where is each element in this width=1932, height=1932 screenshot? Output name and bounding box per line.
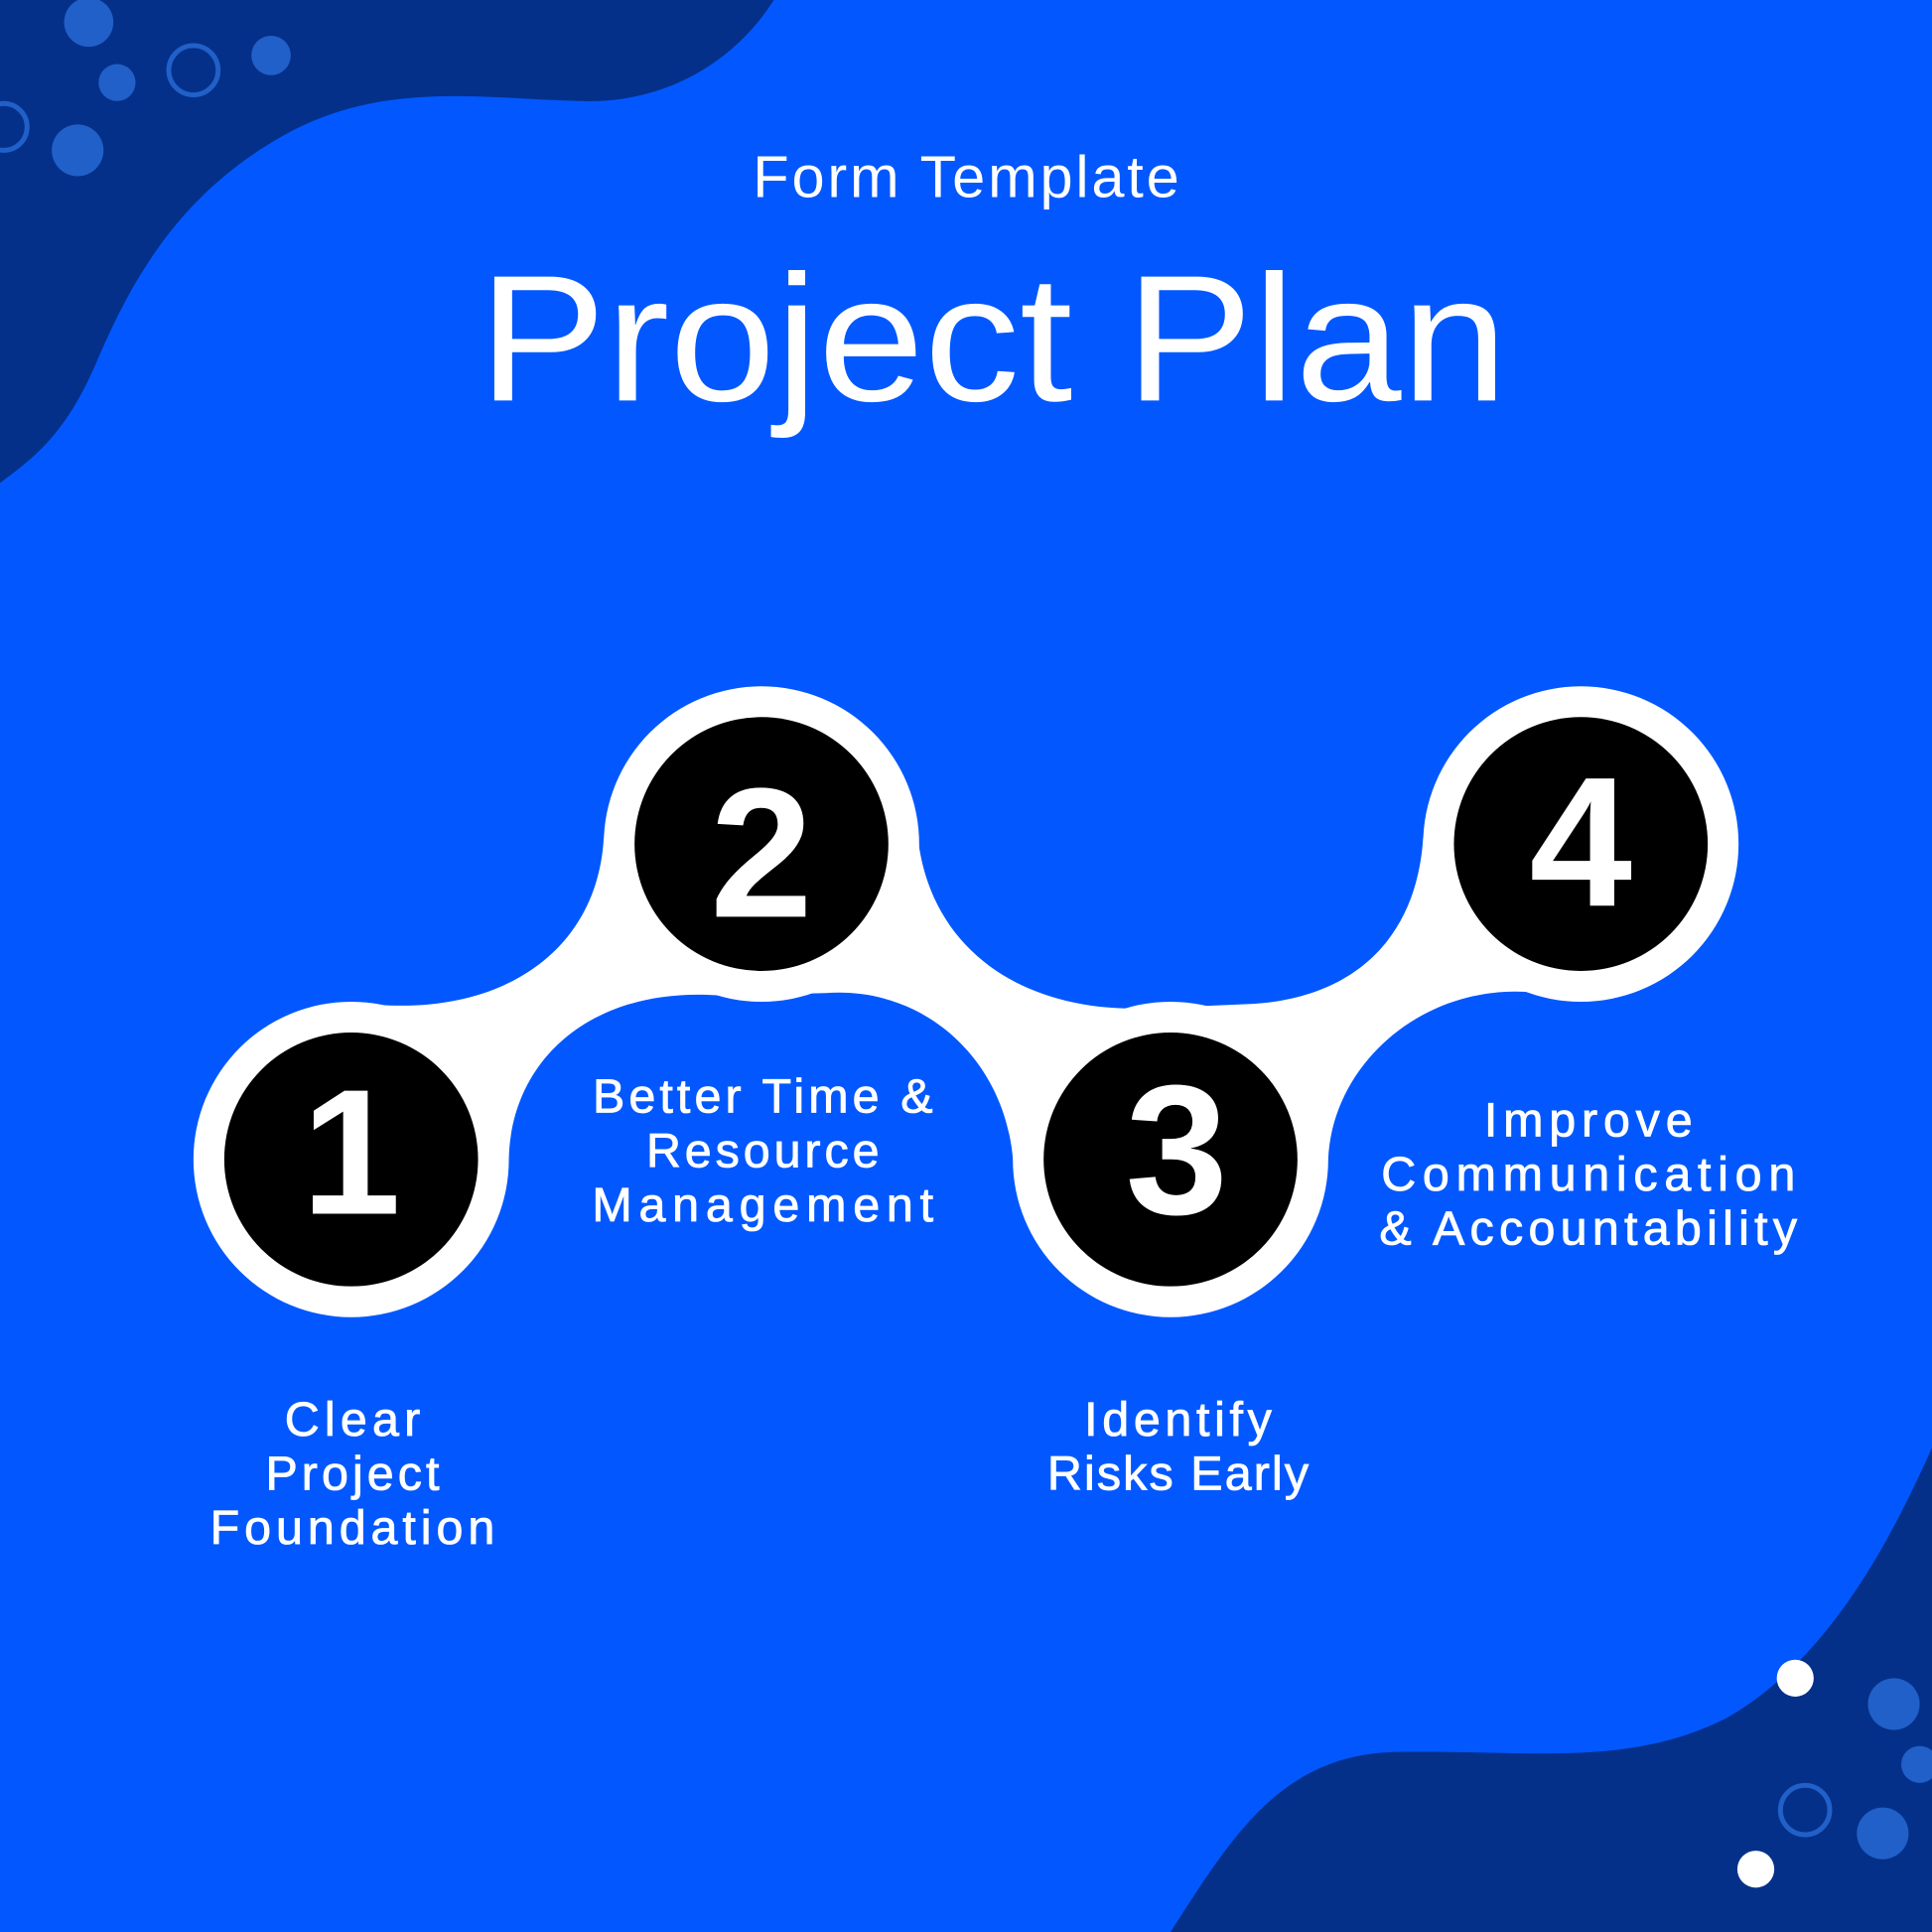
label 2: Management [592,1178,934,1232]
title: Project Plan [479,238,1507,439]
label 1: Clear [285,1393,420,1447]
process chain [194,686,1738,1317]
label 3: Identify [1084,1393,1273,1447]
step 1 circle: 1 [302,1052,401,1252]
label 4: Communication [1381,1148,1795,1201]
step 4 circle [1423,686,1738,1002]
label 3: Risks Early [1047,1447,1310,1500]
label 2: Better Time & [593,1070,932,1124]
label 1: Project [265,1447,440,1500]
step 2 circle [604,686,919,1002]
label 4: Improve [1484,1093,1693,1147]
step 4 circle: 4 [1530,739,1632,945]
step 3 circle [1013,1002,1328,1317]
label 1: Foundation [210,1501,494,1555]
label 4: & Accountability [1379,1201,1798,1255]
subtitle: Form Template [753,144,1181,210]
step 3 circle: 3 [1125,1046,1228,1253]
blob: top-left decoration [0,0,773,483]
label 2: Resource [646,1124,880,1177]
step 1 circle [194,1002,509,1317]
step 2 circle: 2 [710,750,813,956]
blob: bottom-right decoration [1171,1448,1932,1932]
